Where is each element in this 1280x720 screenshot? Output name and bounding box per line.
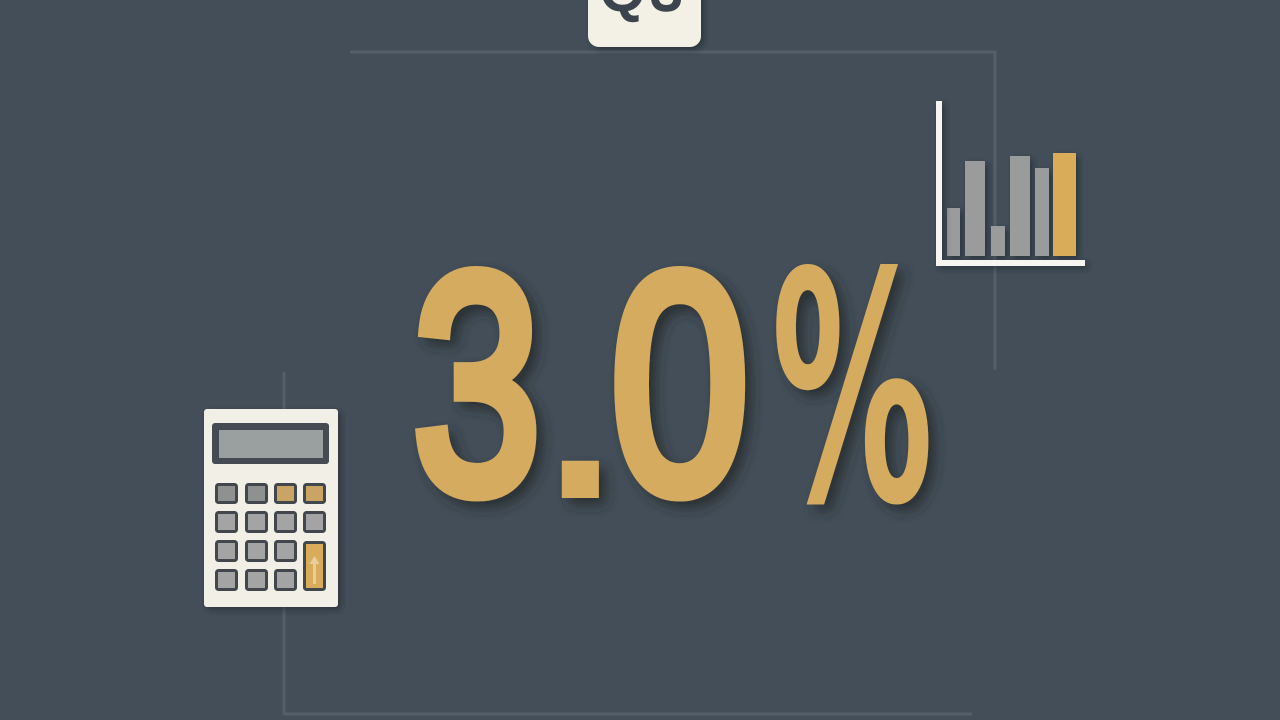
calculator screen: [212, 423, 329, 464]
bars: [947, 153, 1076, 256]
axes: [939, 101, 1085, 263]
big number: 3.0%: 0: [611, 211, 748, 557]
badge: Q3: [588, 0, 701, 47]
big number: 3.0%: .: [544, 273, 617, 552]
big number: 3.0%: 3: [413, 210, 541, 556]
icon: calculator: [204, 409, 338, 607]
big number: 3.0%: %: [771, 205, 933, 576]
equals key mark: [310, 556, 320, 584]
big number: 3.0%: [413, 205, 933, 576]
icon: bar chart: [939, 101, 1085, 263]
calculator keys: [216, 484, 324, 590]
